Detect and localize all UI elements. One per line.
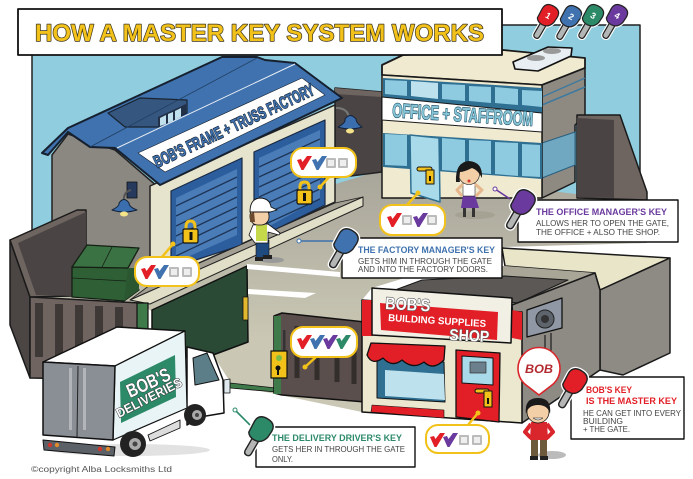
factory manager's key panel: AND INTO THE FACTORY DOORS. bbox=[358, 265, 488, 274]
shop window bbox=[377, 358, 445, 402]
wall lamp right bbox=[336, 108, 362, 134]
cab bbox=[187, 347, 230, 425]
front wheel bbox=[184, 404, 206, 426]
shop roof bbox=[395, 276, 568, 303]
shop name text: BUILDING SUPPLIES bbox=[388, 313, 487, 330]
side wall left bbox=[512, 273, 600, 423]
office manager's key panel: THE OFFICE + ALSO THE SHOP. bbox=[536, 228, 660, 237]
shop wall air conditioner bbox=[527, 298, 562, 355]
delivery driver's key panel: ONLY. bbox=[272, 455, 293, 464]
ground shadow bbox=[50, 444, 210, 456]
awning bbox=[367, 343, 445, 366]
Bob's master key panel bbox=[552, 366, 684, 439]
bumper bbox=[43, 440, 115, 456]
factory roof bbox=[42, 57, 342, 185]
gate key reader bbox=[271, 330, 287, 378]
office manager figure bbox=[455, 161, 495, 219]
box side bbox=[113, 331, 187, 440]
right perimeter wall bbox=[577, 115, 647, 200]
side step bbox=[148, 420, 180, 441]
lower windows bbox=[383, 133, 542, 179]
Bob's master key panel: BOB'S KEY bbox=[586, 385, 632, 395]
office front wall bbox=[382, 75, 542, 198]
delivery driver's key panel: THE DELIVERY DRIVER'S KEY bbox=[272, 433, 402, 443]
back wall behind factory and office bbox=[335, 88, 382, 178]
office roof bbox=[382, 50, 585, 85]
left perimeter wall bbox=[10, 210, 86, 378]
gate base line bbox=[230, 383, 276, 392]
key 4 purple: 4 bbox=[613, 10, 622, 21]
shop front bbox=[362, 300, 522, 423]
box top bbox=[43, 327, 185, 366]
tick callout: factory left door bbox=[135, 242, 199, 286]
factory manager figure bbox=[249, 198, 284, 263]
shop building bbox=[362, 288, 522, 423]
green truck sign: BOB'S bbox=[123, 365, 174, 403]
padlock left bbox=[183, 221, 198, 243]
factory door left bbox=[171, 158, 242, 268]
factory manager's key panel: THE FACTORY MANAGER'S KEY bbox=[358, 245, 495, 255]
factory roof sign: BOB'S FRAME + TRUSS FACTORY bbox=[151, 80, 318, 172]
Bob speech bubble bbox=[518, 348, 560, 395]
copyright: ©copyright Alba Locksmiths Ltd bbox=[31, 465, 172, 474]
rear doors bbox=[43, 362, 115, 440]
office manager's key panel: ALLOWS HER TO OPEN THE GATE, bbox=[536, 219, 669, 228]
roof vent bbox=[108, 98, 187, 127]
shop sign bbox=[372, 288, 512, 346]
office door bbox=[410, 135, 440, 202]
red side panels bbox=[362, 300, 373, 336]
factory building bbox=[42, 57, 342, 285]
dumpster bbox=[72, 245, 139, 301]
factory front wall bbox=[150, 105, 335, 285]
shop name text bbox=[385, 294, 490, 346]
back cream wall bbox=[395, 248, 670, 423]
wall lamp left bbox=[112, 182, 137, 216]
office sign: OFFICE + STAFFROOM bbox=[392, 100, 534, 131]
Bob's master key panel: BUILDING bbox=[583, 417, 623, 426]
key 2 blue: 2 bbox=[567, 11, 576, 22]
bottom red strip bbox=[371, 405, 444, 418]
shop door bbox=[456, 350, 500, 422]
factory manager's key panel: GETS HIM IN THROUGH THE GATE bbox=[358, 257, 492, 266]
tick callout: gate bbox=[291, 327, 357, 370]
legend keys 1 to 4 bbox=[528, 2, 630, 43]
title box: HOW A MASTER KEY SYSTEM WORKS bbox=[35, 20, 484, 47]
tick callout: factory door bbox=[291, 148, 356, 190]
title box bbox=[18, 9, 502, 55]
Bob figure bbox=[525, 398, 566, 460]
sidewalk in front of factory bbox=[130, 197, 363, 304]
delivery driver's key panel: GETS HER IN THROUGH THE GATE bbox=[272, 445, 405, 454]
tick callout: office door bbox=[380, 190, 445, 235]
green truck sign: DELIVERIES bbox=[114, 374, 185, 421]
key 1 red: 1 bbox=[544, 10, 553, 21]
office building bbox=[382, 47, 585, 202]
Bob's master key panel: IS THE MASTER KEY bbox=[586, 396, 677, 406]
factory roof sign bbox=[138, 78, 325, 172]
factory manager's key panel bbox=[297, 226, 502, 278]
roof air-con unit bbox=[513, 47, 572, 71]
factory door right bbox=[254, 120, 325, 240]
Bob speech bubble: BOB bbox=[525, 362, 553, 376]
key 3 green: 3 bbox=[589, 10, 598, 21]
gate post bbox=[137, 303, 148, 353]
road markings bbox=[247, 264, 340, 298]
Bob's master key panel: + THE GATE. bbox=[583, 425, 630, 434]
shop name text: SHOP bbox=[449, 327, 490, 346]
rear wheel bbox=[120, 431, 146, 457]
Bob's master key panel: HE CAN GET INTO EVERY bbox=[583, 409, 682, 418]
right gate wall bbox=[274, 313, 365, 402]
office door handle bbox=[417, 167, 434, 184]
front wall with slats bbox=[30, 297, 140, 380]
shop name text: BOB'S bbox=[385, 294, 431, 315]
tick callout: shop door bbox=[426, 410, 489, 453]
gate panel bbox=[152, 266, 248, 360]
delivery driver's key panel bbox=[233, 408, 415, 467]
office side wall bbox=[542, 68, 585, 198]
factory side wall bbox=[52, 134, 160, 285]
side wall right bbox=[600, 258, 670, 375]
office manager's key panel: THE OFFICE MANAGER'S KEY bbox=[536, 207, 667, 217]
padlock right bbox=[297, 182, 312, 204]
ground bbox=[30, 170, 647, 412]
delivery truck bbox=[43, 327, 230, 457]
upper windows bbox=[383, 78, 542, 113]
office manager's key panel bbox=[493, 187, 678, 242]
office sign bbox=[382, 97, 542, 132]
sky background bbox=[32, 25, 640, 240]
gate latch bbox=[243, 297, 248, 320]
green truck sign bbox=[114, 355, 185, 423]
